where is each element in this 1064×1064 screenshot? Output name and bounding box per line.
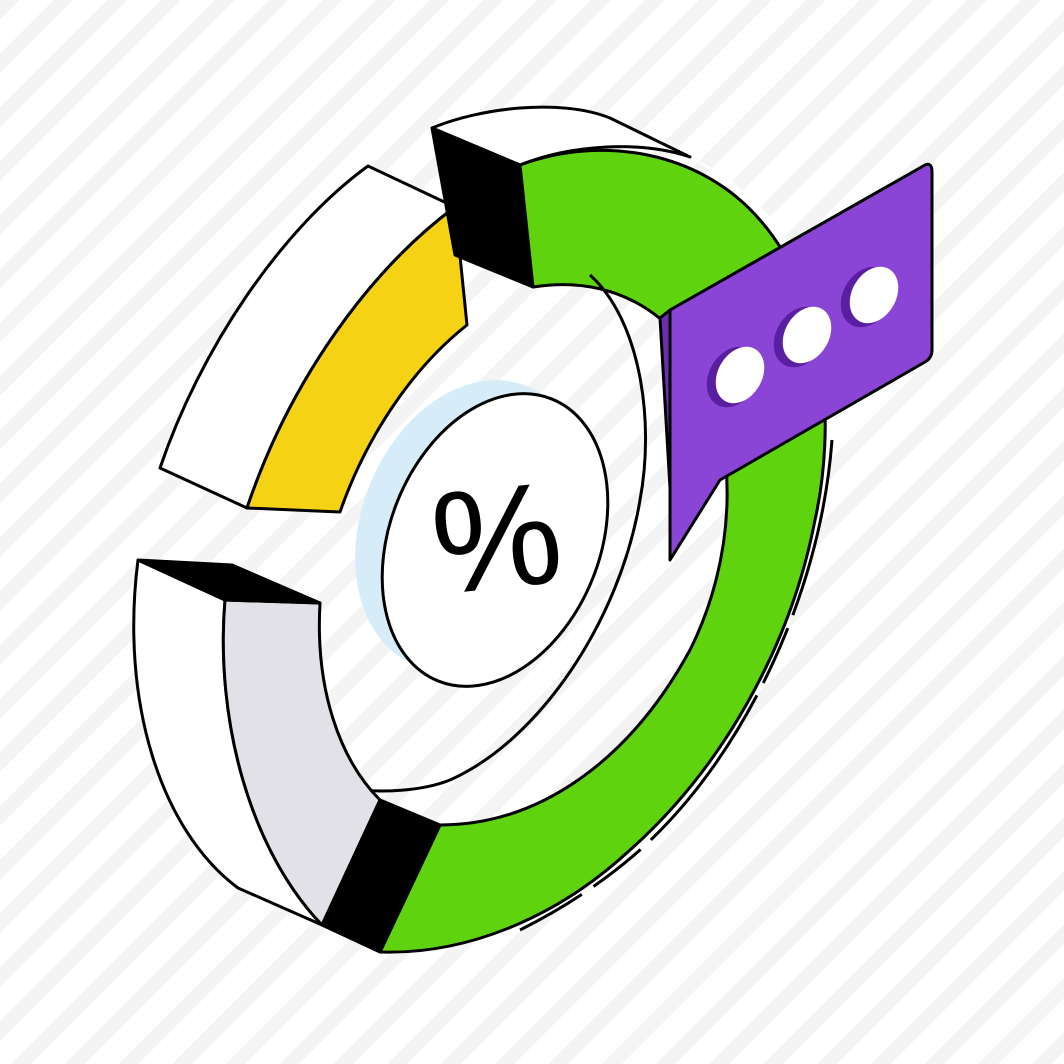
bubble dots (696, 257, 908, 417)
ring segment: green outer side strip (380, 157, 834, 952)
ring segment: top white cap (432, 107, 690, 165)
ring segment: bottom-left white side (134, 560, 322, 925)
ring segment: bottom-left black cap (138, 560, 320, 603)
ring segment: green main (380, 150, 825, 952)
ring segment: yellow (247, 207, 467, 512)
ring segment: grey (223, 600, 380, 925)
ring segment: bottom black edge (322, 800, 440, 952)
ring: inner boundary line (360, 275, 646, 791)
ring segment: top-left white side (160, 166, 455, 508)
inner disc shadow (314, 345, 626, 705)
speech bubble (660, 164, 932, 560)
percent sign: % (424, 451, 569, 625)
inner disc (341, 360, 649, 720)
ring segment: top black edge (432, 128, 533, 287)
